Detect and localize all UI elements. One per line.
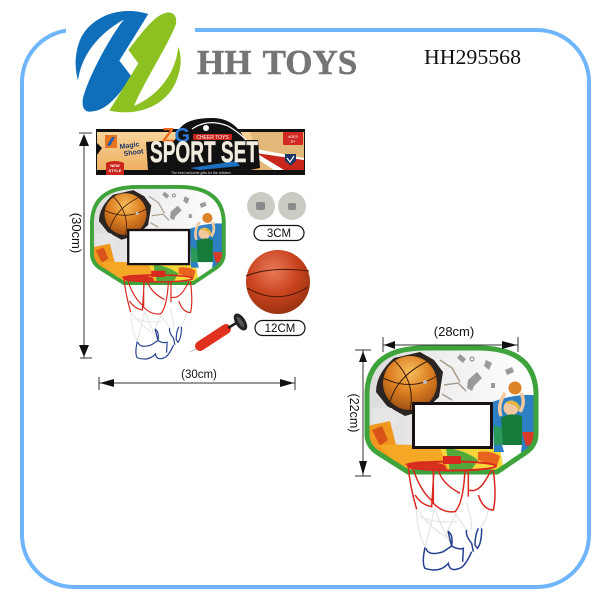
wall cracks [372,352,466,430]
blue net [423,528,482,570]
red ball [246,250,310,314]
banner: sport set: CHEER TOYS [196,135,229,141]
dimension: hoop width 28cm: (28cm) [434,324,474,339]
banner: sport set [96,118,305,175]
label: 3CM [254,226,304,240]
dimension: hoop width 28cm [383,324,518,352]
mounting discs [247,192,306,220]
dimension: hoop height 22cm: (22cm) [347,394,361,432]
air pump [190,313,248,352]
banner: sport set: The best welcome gifts for the children [171,171,231,175]
frame gap behind logo [66,22,195,38]
banner: sport set: Shoot [123,148,145,158]
banner: sport set: 3+ [290,139,296,144]
small hoop [92,187,227,359]
dimension: hoop height 22cm [347,350,371,476]
banner: sport set: SPORT SET [150,136,258,169]
logo [76,11,181,112]
colourful graphic [367,395,540,472]
large hoop [367,348,540,570]
score window [414,404,492,448]
red rim and net [408,456,496,512]
dimension: left height 30cm: (30cm) [69,213,84,253]
white net [417,503,488,547]
banner: sport set: NEW [110,163,120,168]
boy figure [500,382,523,458]
banner: sport set: Magic [119,141,140,151]
label: 12CM: 12CM [265,323,295,335]
flying debris [457,354,514,391]
dimension: bottom width 30cm: (30cm) [181,369,217,381]
banner: sport set: ZG [162,125,190,147]
banner: sport set: AGES [288,135,299,139]
basketball [383,356,437,410]
dimension: left height 30cm [69,133,92,358]
brand name: HH TOYS [197,43,357,82]
dimension: bottom width 30cm [99,369,295,390]
label: 3CM: 3CM [267,228,291,240]
model number: HH295568 [424,45,521,69]
label: 12CM [255,320,305,336]
backboard [367,348,540,472]
banner: sport set: STYLE [109,168,122,173]
